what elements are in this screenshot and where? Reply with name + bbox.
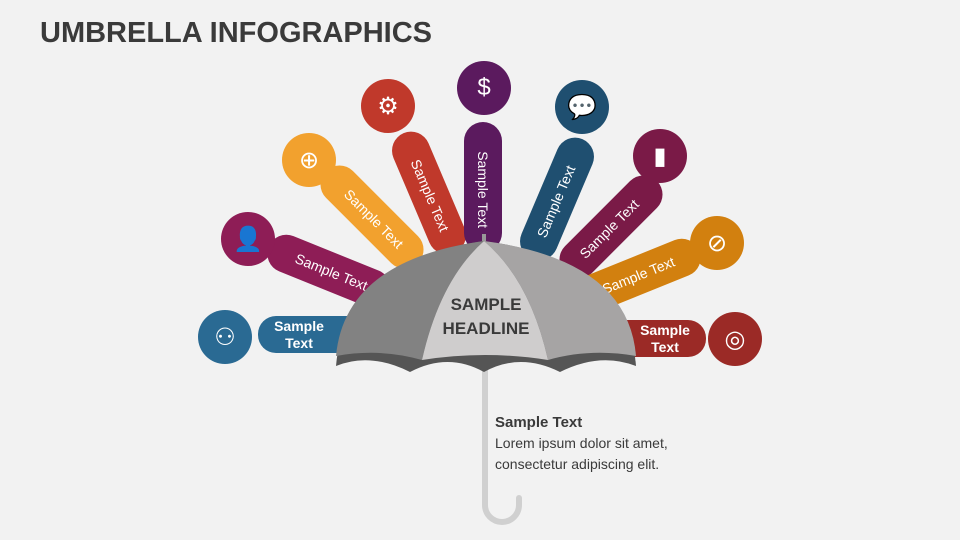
pill: dark red right: Text: [651, 338, 679, 354]
icons: [198, 310, 252, 364]
canopy: [336, 234, 636, 372]
pill: maroon: [552, 168, 670, 286]
pill: blue left: [258, 316, 368, 353]
text: ⊕: [299, 146, 319, 174]
pill: purple: [464, 122, 502, 252]
text: $: [477, 74, 491, 101]
pill: blue left: Text: [285, 334, 313, 350]
pill: dark red right: Sample: [640, 322, 690, 338]
pill: teal: [514, 132, 600, 266]
text: ◎: [725, 326, 745, 352]
icons: ⚇: [214, 324, 236, 350]
text: ▮: [653, 142, 667, 170]
pill: magenta: [262, 229, 396, 313]
body text: Sample Text: [495, 414, 582, 431]
text: ⚙: [377, 92, 399, 120]
title: UMBRELLA INFOGRAPHICS: [40, 17, 432, 49]
text: 💬: [567, 94, 597, 120]
body text: consectetur adipiscing elit.: [495, 456, 659, 472]
text: 👤: [233, 226, 263, 252]
pill: dark orange: Sample Text: [600, 253, 677, 297]
text: ⊘: [707, 230, 727, 256]
pill: purple: Sample Text: [475, 151, 491, 228]
handle: [485, 360, 519, 522]
pill: dark red right: [604, 320, 706, 357]
pill: magenta: Sample Text: [293, 250, 370, 294]
pill: red: Sample Text: [408, 157, 452, 234]
pill: blue left: Sample: [274, 318, 324, 334]
body text: Lorem ipsum dolor sit amet,: [495, 435, 668, 451]
pill: red: [386, 126, 472, 260]
pill: dark orange: [572, 233, 706, 317]
pill: orange: [313, 158, 431, 276]
pill: maroon: Sample Text: [576, 196, 642, 262]
headline: SAMPLE: [451, 295, 521, 314]
pill: orange: Sample Text: [341, 186, 407, 252]
umbrella: HEADLINE: [443, 319, 529, 338]
body text: [495, 414, 668, 472]
pill: teal: Sample Text: [534, 163, 578, 240]
